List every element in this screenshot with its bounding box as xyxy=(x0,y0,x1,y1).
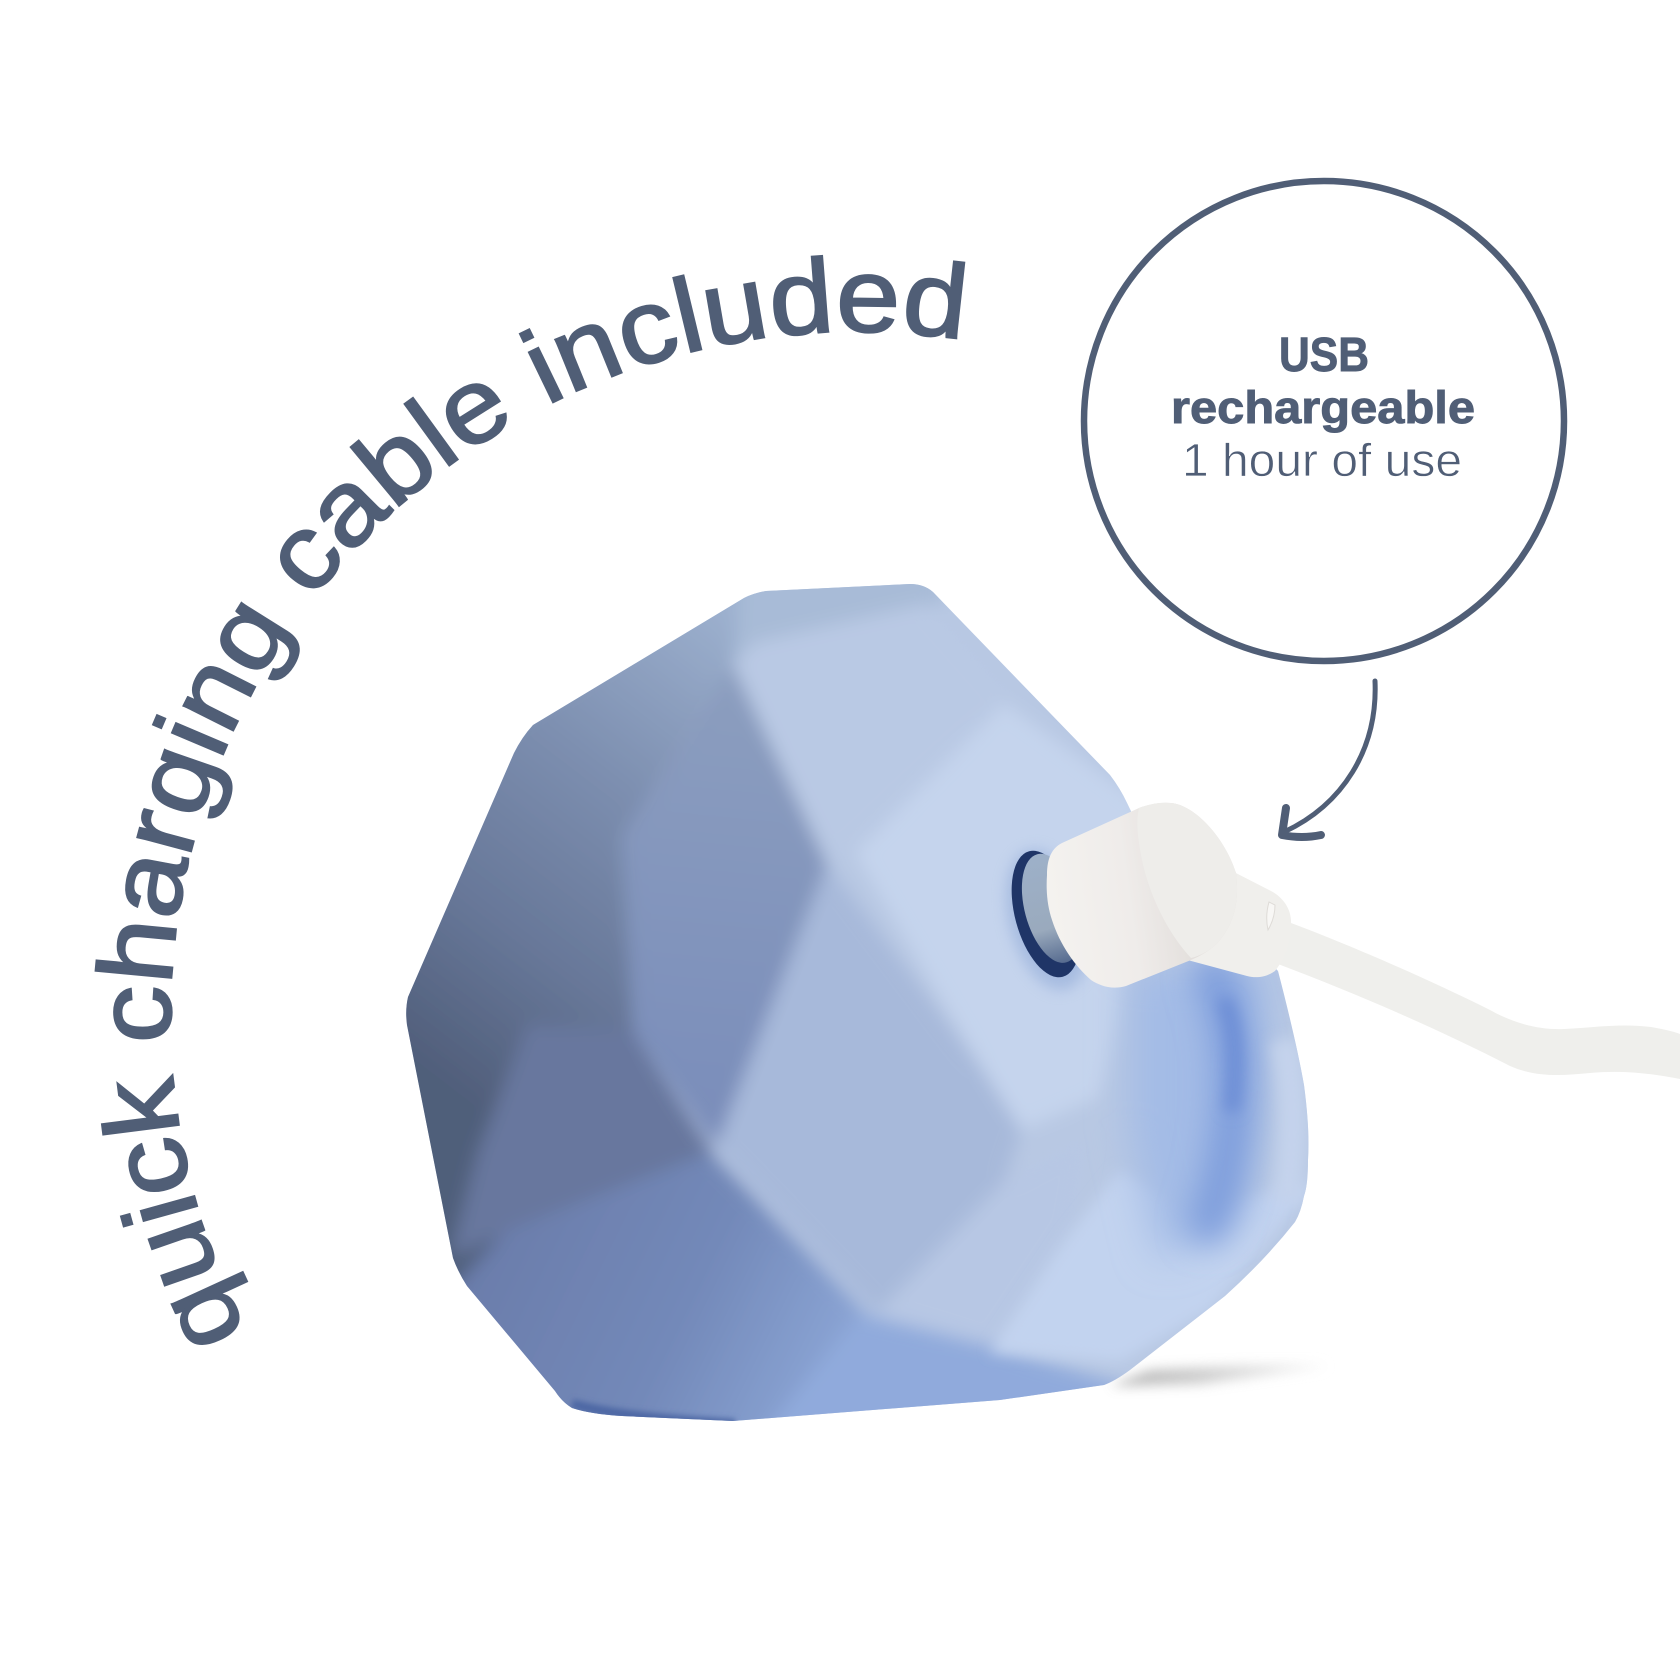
facet: lower central light xyxy=(877,1136,1088,1347)
recess wash xyxy=(1130,965,1270,1260)
facet: bright upper right xyxy=(863,712,1131,1124)
callout text: 1 hour of use: 1 hour of use xyxy=(1182,434,1462,486)
callout circle: USB rechargeable xyxy=(1084,181,1564,661)
bottom edge shade xyxy=(572,1404,735,1424)
facet: lower mid left xyxy=(450,1025,716,1258)
connector plug xyxy=(1047,803,1291,988)
facet: upper light xyxy=(738,640,769,668)
facet: bottom right lobe xyxy=(991,1180,1290,1360)
facet: top strip xyxy=(733,559,944,664)
plug cap side xyxy=(1047,803,1237,988)
facet: left dark zone xyxy=(406,598,745,1288)
facet: bottom left xyxy=(458,1152,867,1421)
ground shadow under product xyxy=(1110,1366,1330,1386)
product: faceted blue device xyxy=(406,584,1308,1421)
callout text: USB: USB xyxy=(1279,329,1369,382)
right rim highlight xyxy=(1284,1040,1293,1200)
cable xyxy=(1278,923,1680,1079)
plug notch xyxy=(1267,902,1275,930)
plug cap face xyxy=(1137,803,1237,958)
arrow: from callout to charging port xyxy=(1282,681,1375,837)
facet: central xyxy=(716,864,1021,1313)
plug neck xyxy=(1180,870,1291,977)
facet: mid left diamond xyxy=(622,664,827,1147)
facet: bottom centre xyxy=(744,1313,1143,1458)
charging port recess xyxy=(992,840,1103,999)
recess deep curved band xyxy=(1208,975,1235,1225)
curved heading: quick charging cable included: quick charging cable included xyxy=(94,254,966,1345)
callout text: rechargeable: rechargeable xyxy=(1171,382,1475,433)
